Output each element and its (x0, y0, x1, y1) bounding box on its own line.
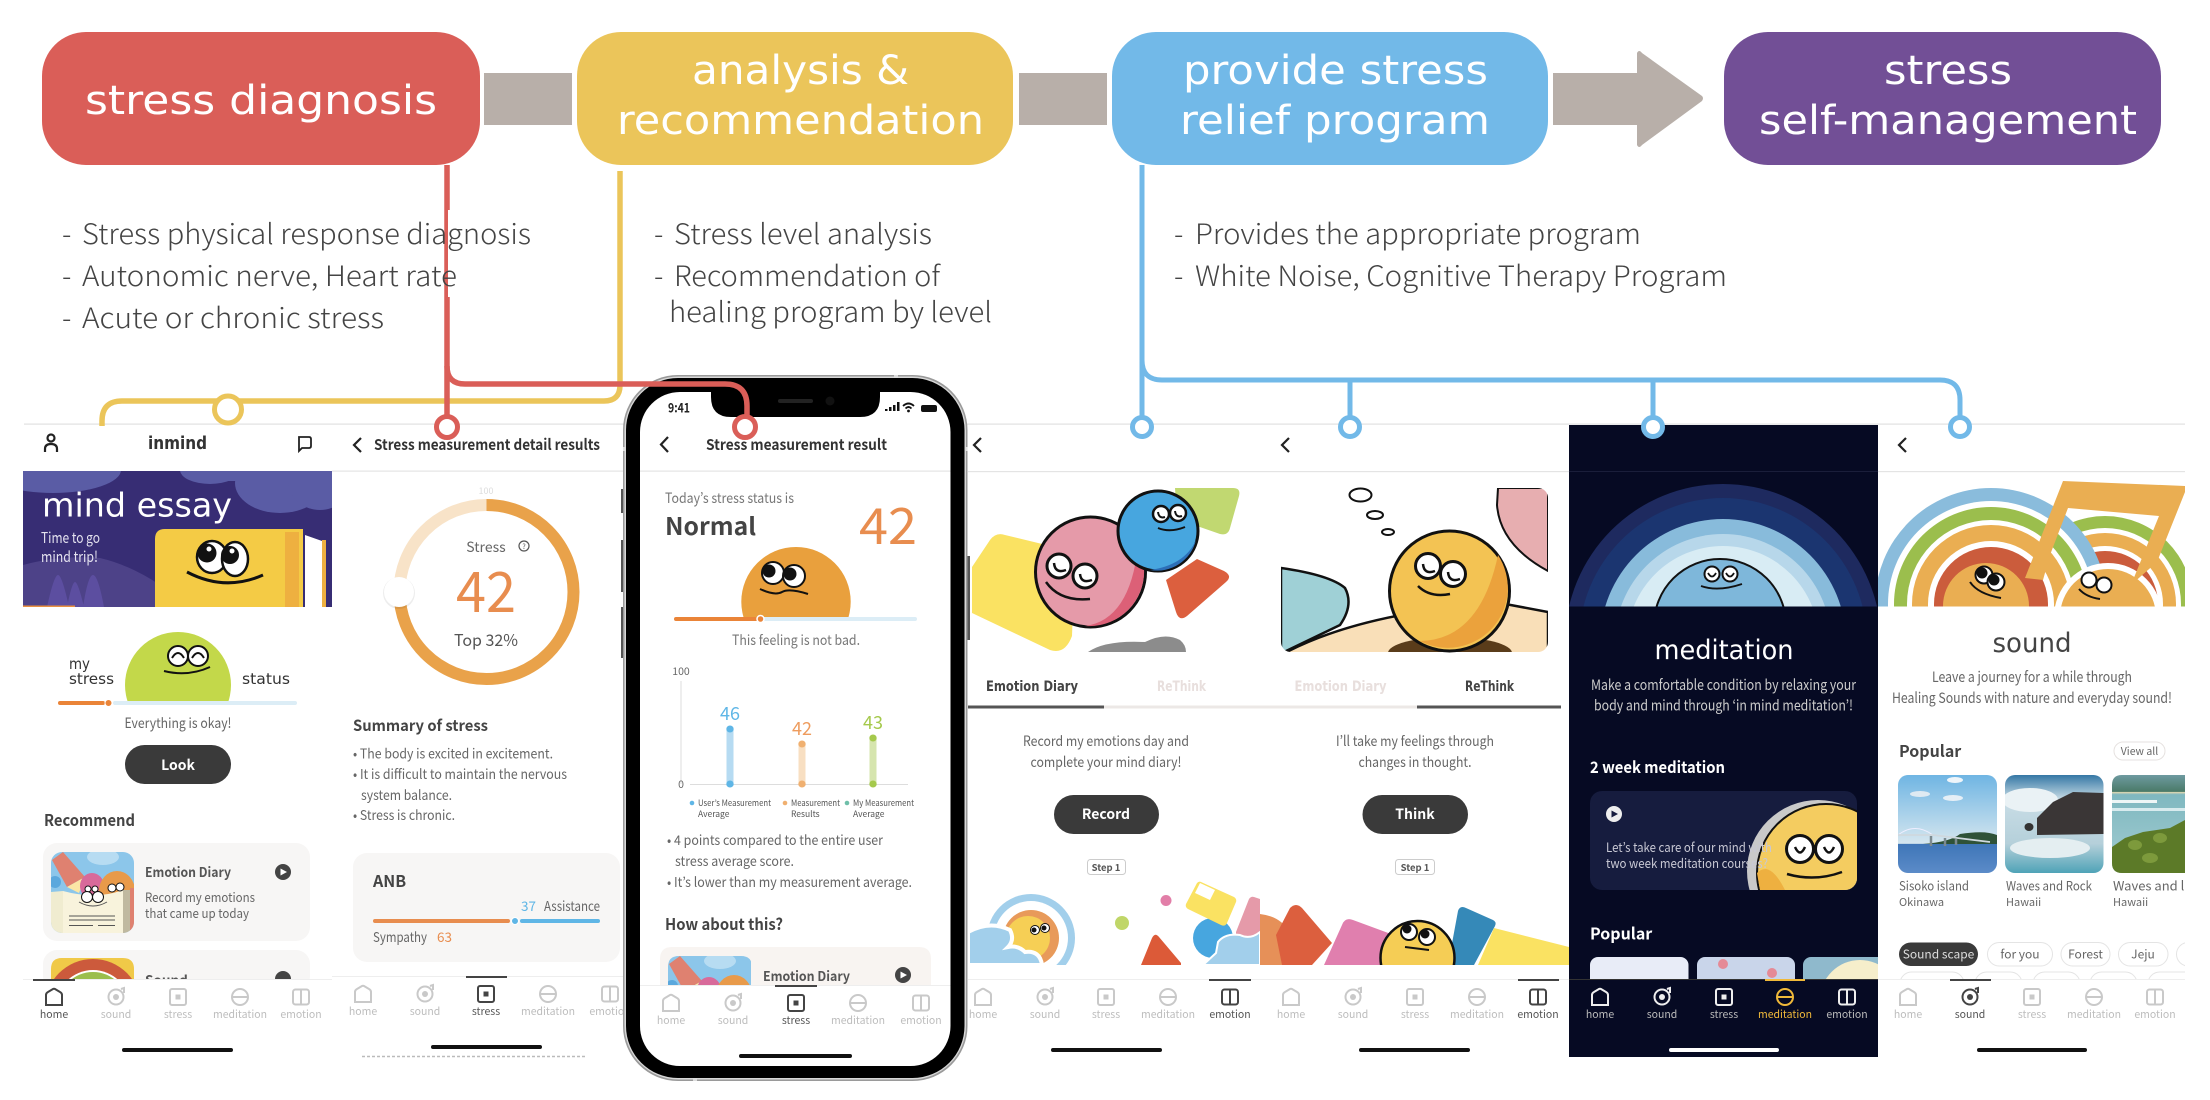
tab bar: stress detail: stress (472, 1004, 500, 1019)
tab bar: meditation: meditation (1758, 1007, 1812, 1022)
result notes: • It’s lower than my measurement average. (667, 871, 912, 891)
result status: Normal (665, 507, 756, 542)
step pill: analysis and recommendation: recommendation (617, 98, 984, 144)
step pill: analysis and recommendation: analysis & (692, 48, 909, 94)
app logo: inmind (148, 433, 207, 454)
description: stress diagnosis: - (62, 297, 71, 337)
step pill: stress diagnosis: stress diagnosis (85, 78, 437, 124)
header (968, 438, 1260, 472)
description (1336, 731, 1494, 772)
card: 2 week course: Let’s take care of our mind with (1606, 837, 1772, 856)
step pill: stress self-management: stress (1884, 48, 2012, 94)
chart legend (690, 797, 915, 820)
heading: Popular with view all: Popular (1899, 738, 1961, 762)
tab bar: emotion diary: sound (1030, 1007, 1060, 1022)
description: stress diagnosis: Autonomic nerve, Heart rate (82, 255, 457, 295)
result notes (667, 829, 912, 891)
description: relief program: White Noise, Cognitive Therapy Program (1195, 255, 1727, 295)
connector: stress diagnosis to result screens (436, 165, 756, 438)
tab bar: rethink: stress (1401, 1007, 1429, 1022)
screen 1: home (23, 433, 332, 979)
tab bar: meditation (1569, 979, 1878, 1052)
description: stress diagnosis: Stress physical response diagnosis (82, 213, 531, 253)
stress score ring: ? (522, 542, 526, 552)
heading: How about this: How about this? (665, 911, 783, 935)
description: analysis and recommendation: Stress level analysis (674, 213, 932, 253)
step pill: provide stress relief program: relief program (1180, 98, 1490, 144)
ANB card (353, 853, 620, 962)
description: relief program: Provides the appropriate program (1195, 213, 1641, 253)
tag: Step 1: Step 1 (1401, 860, 1429, 874)
tab bar: meditation: sound (1647, 1007, 1677, 1022)
card: Sound: Sound (145, 969, 188, 989)
connector: relief program to program screens (1132, 165, 1970, 436)
chart legend: Average (698, 808, 730, 820)
tab bar: rethink (1260, 979, 1569, 1052)
heading: Popular with view all (1899, 738, 2165, 762)
bar: users average 46: 46 (720, 700, 740, 726)
heading: Popular with view all: View all (2121, 744, 2158, 759)
status message: This feeling is not bad. (732, 630, 860, 650)
photo: Sisoko island (1898, 775, 1997, 910)
tab bar: home screen: meditation (213, 1007, 267, 1022)
tab bar: stress detail: sound (410, 1004, 440, 1019)
card: Emotion Diary: Record my emotions (145, 887, 255, 906)
tab bar: sound: emotion (2134, 1007, 2176, 1022)
card: Emotion Diary: Emotion Diary (763, 965, 850, 985)
tab bar: meditation: emotion (1826, 1007, 1868, 1022)
summary of stress: system balance. (361, 784, 452, 804)
chart legend: Results (791, 808, 820, 820)
ANB card: Assistance (544, 895, 600, 915)
button: Think (1362, 795, 1468, 834)
description: Leave a journey for a while through (1932, 666, 2132, 687)
step pill: analysis and recommendation (577, 32, 1013, 165)
tab bar: phone: stress (782, 1013, 810, 1028)
character: orange status hill (741, 547, 851, 617)
tabs: ReThink active: ReThink (1465, 679, 1514, 695)
ANB card: 63 (437, 926, 452, 946)
result status (665, 487, 917, 559)
description: analysis and recommendation: Recommendation of (674, 255, 942, 295)
button: Look (125, 745, 231, 784)
tag: Step 1: Step 1 (1092, 860, 1120, 874)
screen 5: meditation (1565, 425, 1900, 1057)
card: Emotion Diary (660, 947, 931, 985)
tab bar: emotion diary: meditation (1141, 1007, 1195, 1022)
header (640, 434, 950, 472)
banner: mind essay: mind trip! (41, 546, 98, 567)
ANB card: Sympathy (373, 926, 427, 946)
chart legend: Measurement (791, 797, 841, 809)
summary of stress: • The body is excited in excitement. (353, 742, 553, 762)
photo: Waves and Rock (2002, 775, 2104, 910)
bar chart: measurement comparison: 100 (672, 664, 690, 679)
heading: meditation: meditation (1654, 635, 1794, 666)
phone mockup: stress measurement result (621, 375, 970, 1081)
bar: users average 46 (720, 700, 740, 788)
bar: my average 43: 43 (863, 709, 883, 735)
photo: Waves and Rock: Hawaii (2006, 894, 2041, 910)
bar: results 42 (792, 715, 812, 788)
status message: Everything is okay! (124, 713, 232, 733)
card: Emotion Diary: that came up today (145, 903, 249, 922)
bar chart: measurement comparison (672, 664, 915, 820)
description: relief program (1174, 213, 1727, 295)
illustration: thinking character (1281, 488, 1548, 669)
category chips: Jeju (2131, 946, 2155, 962)
photo: Sisoko island: Okinawa (1899, 894, 1944, 910)
illustration: emotion characters (972, 488, 1239, 652)
result notes: • 4 points compared to the entire user (667, 829, 884, 849)
tab bar: phone: meditation (831, 1013, 885, 1028)
result status: 42 (859, 487, 917, 559)
tabs: ReThink active: Emotion Diary (1294, 679, 1387, 695)
description: stress diagnosis: - (62, 213, 71, 253)
description: analysis and recommendation (654, 213, 992, 331)
description: I’ll take my feelings through (1336, 731, 1494, 751)
screen 6: sound (1875, 438, 2210, 1052)
tab bar: sound (1878, 979, 2185, 1052)
tab bar: stress detail: emotion (589, 1004, 631, 1019)
popular thumbnails (1590, 957, 1878, 979)
tabs: Emotion Diary active: ReThink (1157, 679, 1206, 695)
category chips: Forest (2068, 946, 2103, 962)
heading: 2 week meditation: 2 week meditation (1590, 754, 1725, 778)
ANB card: ANB (372, 868, 406, 892)
tab bar: meditation: stress (1710, 1007, 1738, 1022)
tab bar: sound: home (1894, 1007, 1922, 1022)
stress score ring: Top 32% (454, 627, 518, 651)
heading: Recommend: Recommend (44, 807, 135, 831)
connector bar 2 (1019, 73, 1107, 125)
stress score ring (383, 484, 574, 679)
icon: chat (299, 437, 311, 451)
illustration: shapes and worried character (1260, 905, 1569, 965)
ANB card: 37 (521, 895, 536, 915)
card: Sound (43, 950, 310, 979)
character: green status hill (125, 632, 231, 701)
banner: mind essay: mind essay (42, 486, 232, 524)
card: Emotion Diary: Emotion Diary (145, 861, 231, 881)
tab bar: home screen: sound (101, 1007, 131, 1022)
step pill: provide stress relief program: provide stress (1183, 48, 1488, 94)
step pill: stress self-management (1724, 32, 2161, 165)
tab bar: phone: emotion (900, 1013, 942, 1028)
tab bar: stress detail (332, 976, 631, 1056)
tab bar: emotion diary: stress (1092, 1007, 1120, 1022)
summary of stress: • Stress is chronic. (353, 804, 455, 824)
icon: profile (45, 434, 57, 452)
card: 2 week course (1590, 791, 1857, 890)
button: Record (1054, 795, 1159, 834)
tab bar: phone (640, 985, 950, 1058)
tab bar: emotion diary (968, 979, 1260, 1052)
separator line above the screens (24, 424, 2185, 425)
description: relief program: - (1174, 255, 1183, 295)
step pill: provide stress relief program (1112, 32, 1548, 165)
button: Look: Look (161, 755, 195, 775)
heading: sound: sound (1992, 628, 2072, 659)
bar: my average 43 (863, 709, 883, 788)
description (1023, 731, 1189, 772)
description: Record my emotions day and (1023, 731, 1189, 751)
banner: mind essay: Time to go (41, 527, 100, 548)
tabs: ReThink active (1260, 679, 1561, 708)
tag: Step 1 (1396, 860, 1434, 874)
description: body and mind through ‘in mind meditation’! (1594, 694, 1853, 716)
tab bar: rethink: meditation (1450, 1007, 1504, 1022)
tab bar: home screen: stress (164, 1007, 192, 1022)
category chips: for you (2000, 946, 2040, 962)
chart legend: User’s Measurement (698, 797, 772, 809)
tab bar: sound: stress (2018, 1007, 2046, 1022)
header (1260, 438, 1569, 472)
description: analysis and recommendation: - (654, 255, 663, 295)
button: Record: Record (1082, 804, 1130, 824)
description: analysis and recommendation: - (654, 213, 663, 253)
heading: Popular: Popular (1590, 920, 1652, 944)
description (1591, 674, 1856, 716)
screen 2: stress detail results (332, 434, 623, 962)
tab bar: meditation: home (1586, 1007, 1614, 1022)
chart legend: Average (853, 808, 885, 820)
header (1878, 438, 2185, 472)
category chips: Sound scape (1903, 946, 1975, 962)
illustration: blue rainbow (1569, 484, 1877, 606)
screen 4: rethink (1260, 438, 1569, 995)
tab bar: phone: home (657, 1013, 685, 1028)
category chips (1899, 942, 2185, 979)
tab bar: sound: sound (1955, 1007, 1985, 1022)
status bar (668, 398, 937, 416)
connector: analysis and recommendation to home screen (102, 171, 620, 426)
stress score ring: 100 (478, 484, 494, 497)
header (332, 434, 623, 472)
summary of stress (353, 714, 567, 824)
description: analysis and recommendation: healing program by level (669, 291, 992, 331)
result status: Today’s stress status is (665, 488, 794, 508)
tab bar: rethink: sound (1338, 1007, 1368, 1022)
summary of stress: • It is difficult to maintain the nervous (353, 763, 567, 783)
description: stress diagnosis: - (62, 255, 71, 295)
tab bar: stress detail: meditation (521, 1004, 575, 1019)
illustration: sun and shapes (970, 882, 1260, 965)
arrow to self-management (1553, 51, 1703, 147)
stress score ring: 42 (456, 548, 516, 629)
description (1892, 666, 2172, 708)
result notes: stress average score. (675, 850, 794, 870)
bar chart: measurement comparison: 0 (678, 777, 684, 792)
photo: Waves and leaves: Hawaii (2113, 894, 2148, 910)
header: Stress measurement detail results (374, 434, 600, 455)
tab bar: home screen (23, 979, 332, 1052)
step pill: stress self-management: self-management (1759, 98, 2137, 144)
card: Emotion Diary (43, 843, 310, 941)
phone frame (621, 375, 970, 1081)
tab bar: home screen: home (40, 1007, 68, 1022)
photo: Waves and Rock: Waves and Rock (2006, 876, 2093, 894)
status labels: stress (69, 670, 114, 688)
stress level slider (58, 700, 297, 706)
stress level slider (674, 616, 917, 622)
tab bar: phone: sound (718, 1013, 748, 1028)
photo: Sisoko island: Sisoko island (1899, 876, 1969, 894)
tab bar: emotion diary: home (969, 1007, 997, 1022)
connector bar 1 (484, 73, 572, 125)
tabs: Emotion Diary active (968, 679, 1260, 708)
header: Stress measurement result (706, 434, 888, 455)
illustration: sound rainbow and note (1878, 481, 2185, 606)
tab bar: rethink: emotion (1517, 1007, 1559, 1022)
bar: results 42: 42 (792, 715, 812, 741)
banner: mind essay (23, 471, 332, 607)
status labels: my (69, 655, 90, 673)
status labels: status (242, 670, 290, 688)
tab bar: stress detail: home (349, 1004, 377, 1019)
description: stress diagnosis (62, 213, 531, 337)
tab bar: sound: meditation (2067, 1007, 2121, 1022)
description: complete your mind diary! (1030, 752, 1182, 772)
summary of stress: Summary of stress (353, 714, 488, 736)
button: Think: Think (1395, 804, 1435, 824)
chart legend: My Measurement (853, 797, 915, 809)
status labels (70, 660, 290, 684)
description: Make a comfortable condition by relaxing your (1591, 674, 1856, 695)
photo: Waves and leaves (2112, 775, 2185, 906)
tab bar: emotion diary: emotion (1209, 1007, 1251, 1022)
description: relief program: - (1174, 213, 1183, 253)
tab bar: rethink: home (1277, 1007, 1305, 1022)
stress score ring: Stress (466, 537, 506, 557)
card: 2 week course: two week meditation courses? (1606, 853, 1768, 872)
description: changes in thought. (1358, 752, 1472, 772)
step pill: stress diagnosis (42, 32, 480, 165)
tab bar: home screen: emotion (280, 1007, 322, 1022)
screen 3: emotion diary (968, 438, 1260, 982)
tabs: Emotion Diary active: Emotion Diary (986, 679, 1078, 695)
description: stress diagnosis: Acute or chronic stress (82, 297, 384, 337)
status bar: 9:41 (668, 398, 690, 416)
